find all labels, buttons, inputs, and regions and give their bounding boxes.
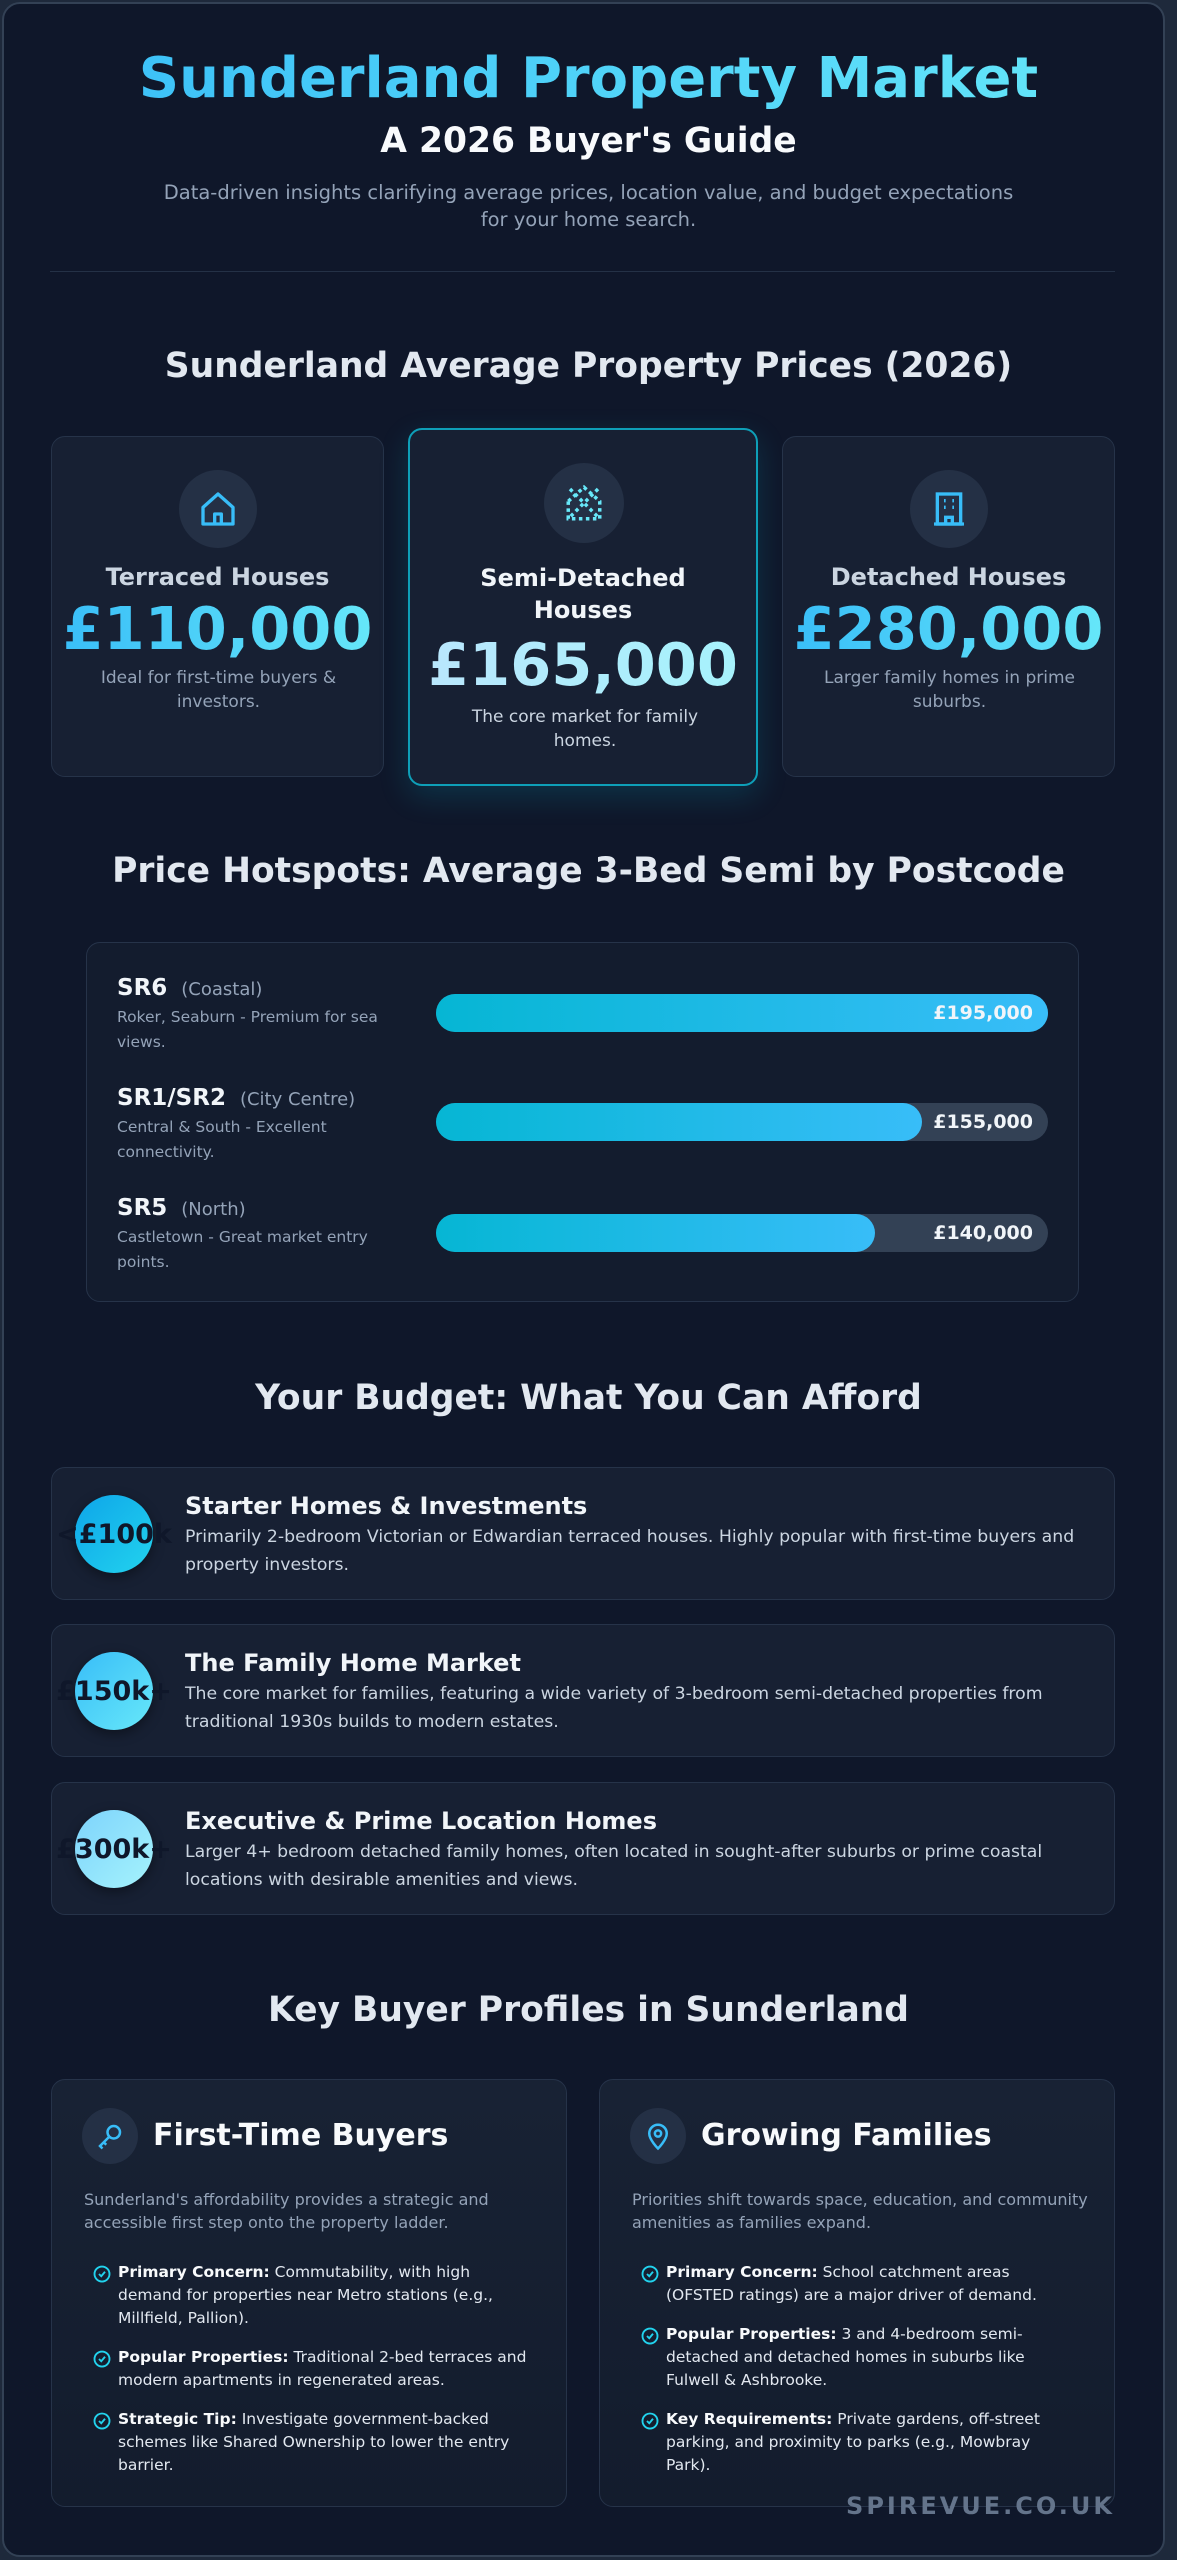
budget: 150k xyxy=(51,1624,1115,1757)
budget: under 100k xyxy=(51,1467,1115,1600)
row: SR5: Castletown - Great market entry points. xyxy=(117,1228,368,1271)
profile: growing families: Priorities shift towards space, education, and community amenities as families expand. xyxy=(632,2190,1088,2232)
bar: SR6 xyxy=(436,994,1048,1032)
profile: growing families: Growing Families xyxy=(701,2118,992,2153)
heading: budget: Your Budget: What You Can Afford xyxy=(255,1378,922,1418)
profile: first-time buyers xyxy=(51,2079,567,2507)
row: SR6: SR6 (Coastal) xyxy=(117,975,262,1001)
profile: growing families: Primary Concern: School catchment areas (OFSTED ratings) are a major driver of demand. xyxy=(666,2263,1037,2304)
card: terraced: Ideal for first-time buyers & investors. xyxy=(101,668,336,712)
heading: average prices: Sunderland Average Property Prices (2026) xyxy=(165,346,1012,386)
icon: building xyxy=(910,470,988,548)
title: Sunderland Property Market xyxy=(139,46,1038,111)
budget: 300k: Larger 4+ bedroom detached family homes, often located in sought-after suburbs or prime coastal locations with desirable amenities and views. xyxy=(185,1842,1042,1890)
card: detached: Detached Houses xyxy=(831,563,1066,591)
card: terraced: £110,000 xyxy=(63,594,372,663)
row: SR1/SR2: SR1/SR2 (City Centre) xyxy=(117,1085,355,1111)
card: semi-detached (highlighted): £165,000 xyxy=(428,630,738,699)
bar: SR6: £195,000 xyxy=(933,1002,1033,1024)
row: SR1/SR2 xyxy=(117,1085,355,1161)
card: terraced: Terraced Houses xyxy=(106,563,329,591)
row: SR6: Roker, Seaburn - Premium for sea views. xyxy=(117,1008,378,1051)
row: SR1/SR2: Central & South - Excellent connectivity. xyxy=(117,1118,327,1161)
bar: SR1/SR2 xyxy=(436,1103,1048,1141)
bar: SR5 xyxy=(436,1214,1048,1252)
budget: under 100k: Starter Homes & Investments xyxy=(185,1492,587,1520)
icon: key xyxy=(82,2108,138,2164)
card: detached: £280,000 xyxy=(794,594,1103,663)
profile: first-time buyers: Popular Properties: Traditional 2-bed terraces and modern apartments in regenerated areas. xyxy=(118,2348,526,2389)
panel: postcode bars xyxy=(86,942,1079,1302)
profile: first-time buyers: Strategic Tip: Investigate government-backed schemes like Shared Ownership to lower the entry barrier. xyxy=(118,2410,509,2474)
subtitle: A 2026 Buyer's Guide xyxy=(380,121,797,161)
row: SR5 xyxy=(117,1195,368,1271)
row: SR5: SR5 (North) xyxy=(117,1195,246,1221)
intro text: Data-driven insights clarifying average prices, location value, and budget expectations for your home search. xyxy=(164,181,1013,231)
budget: 300k xyxy=(51,1782,1115,1915)
profile: growing families xyxy=(599,2079,1115,2507)
bar: SR1/SR2: £155,000 xyxy=(933,1111,1033,1133)
budget: 300k: Executive & Prime Location Homes xyxy=(185,1807,657,1835)
heading: buyer profiles: Key Buyer Profiles in Sunderland xyxy=(268,1990,909,2030)
budget: 150k: The core market for families, featuring a wide variety of 3-bedroom semi-detached properties from traditional 1930s builds to modern estates. xyxy=(185,1684,1043,1732)
budget: under 100k: Primarily 2-bedroom Victorian or Edwardian terraced houses. Highly popular with first-time buyers and property investors. xyxy=(185,1527,1074,1575)
budget: under 100k: <£100k xyxy=(56,1518,172,1550)
card: semi-detached (highlighted): The core market for family homes. xyxy=(472,707,698,751)
profile: first-time buyers: First-Time Buyers xyxy=(153,2118,448,2153)
card: semi-detached (highlighted): Houses xyxy=(534,596,632,624)
heading: hotspots: Price Hotspots: Average 3-Bed Semi by Postcode xyxy=(112,851,1065,891)
icon: house xyxy=(179,470,257,548)
profile: first-time buyers: Primary Concern: Commutability, with high demand for properties near Metro stations (e.g., Millfield, Pallion). xyxy=(118,2263,493,2327)
card: semi-detached (highlighted) xyxy=(408,428,758,786)
budget: 300k: £300k+ xyxy=(56,1834,172,1864)
icon: semi xyxy=(544,463,624,543)
row: SR6 xyxy=(117,975,378,1051)
profile: growing families: Popular Properties: 3 and 4-bedroom semi-detached and detached homes in suburbs like Fulwell & Ashbrooke. xyxy=(666,2325,1025,2389)
profile: first-time buyers: Sunderland's affordability provides a strategic and accessible first step onto the property ladder. xyxy=(84,2190,489,2232)
card: semi-detached (highlighted): Semi-Detached xyxy=(480,564,686,592)
card: detached xyxy=(782,436,1115,777)
bar: SR5: £140,000 xyxy=(933,1222,1033,1244)
card: detached: Larger family homes in prime suburbs. xyxy=(824,668,1075,712)
budget: 150k: The Family Home Market xyxy=(185,1649,521,1677)
card: terraced xyxy=(51,436,384,777)
budget: 150k: £150k+ xyxy=(56,1676,172,1706)
icon: map pin xyxy=(630,2108,686,2164)
footer: brand: SPIREVUE.CO.UK xyxy=(846,2492,1115,2520)
profile: growing families: Key Requirements: Private gardens, off-street parking, and proximity to parks (e.g., Mowbray Park). xyxy=(666,2410,1040,2474)
